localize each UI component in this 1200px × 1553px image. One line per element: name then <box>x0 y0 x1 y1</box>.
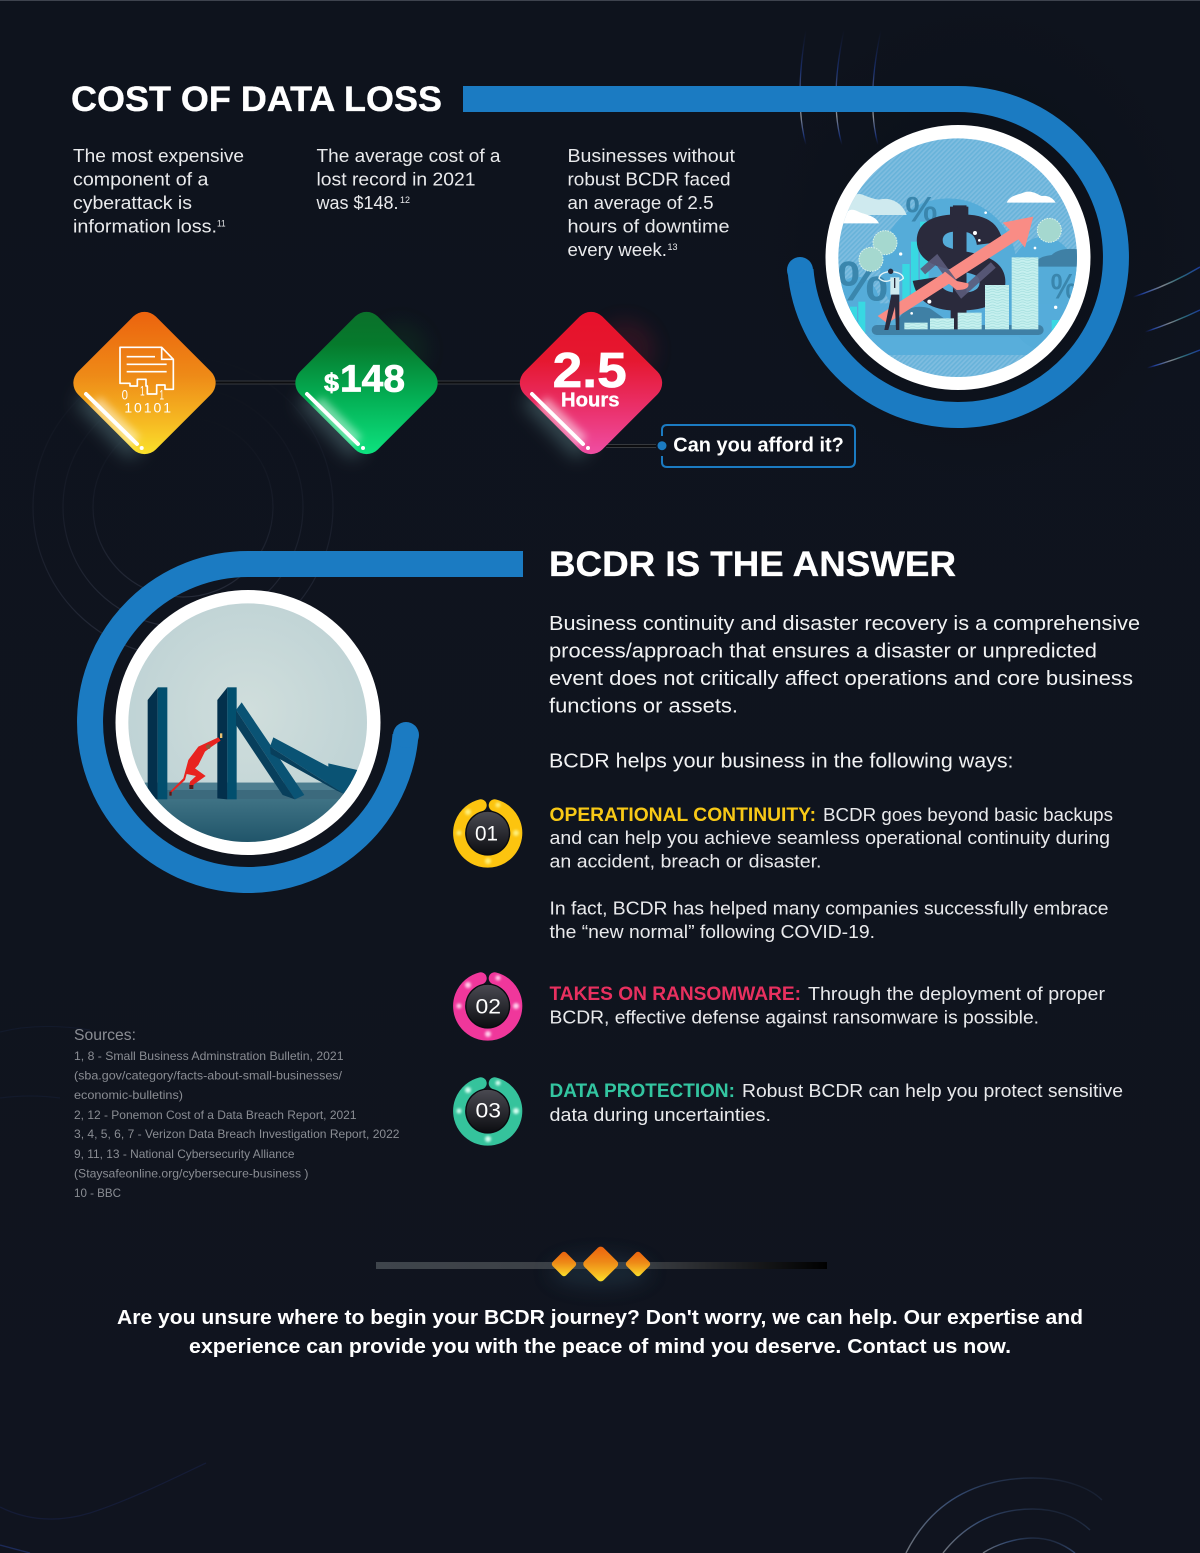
badge: 01 yellow ring <box>456 802 519 864</box>
item: takes on ransomware: TAKES ON RANSOMWARE: <box>550 983 801 1005</box>
sources list: (Staysafeonline.org/cybersecure-business ) <box>74 1167 308 1181</box>
ribbon end cap: BCDR section <box>393 722 419 748</box>
item: operational continuity <box>550 804 1113 942</box>
text block: information loss stat: information loss. <box>73 217 217 237</box>
item: operational continuity: In fact, BCDR has helped many companies successfully embrace <box>550 898 1108 918</box>
white circle frame <box>826 125 1090 390</box>
item: data protection <box>550 1080 1123 1125</box>
closing call to action: Are you unsure where to begin your BCDR journey? Don't worry, we can help. Our expertise and <box>117 1307 1083 1329</box>
sources list: Sources: <box>74 1027 136 1044</box>
text block: downtime stat: Businesses without <box>568 146 735 166</box>
badge: 03 green ring: 03 <box>476 1100 501 1122</box>
text block: downtime stat: an average of 2.5 <box>568 193 714 213</box>
title: cost of data loss: COST OF DATA LOSS <box>71 80 442 119</box>
ribbon end cap: cost section <box>787 257 813 283</box>
stat diamond: $148: 148 <box>340 359 405 401</box>
heading: BCDR is the answer: BCDR IS THE ANSWER <box>549 545 956 584</box>
badge: 02 pink ring: 02 <box>476 996 501 1018</box>
connector: stat 2 to stat 3 <box>436 380 521 384</box>
sources list: 2, 12 - Ponemon Cost of a Data Breach Report, 2021 <box>74 1108 357 1122</box>
illustration: man holding back falling dominoes <box>116 590 380 855</box>
stat diamond: information loss icon <box>72 312 216 462</box>
text block: BCDR definition: Business continuity and disaster recovery is a comprehensive <box>549 613 1140 635</box>
stat diamond: $148: $ <box>324 369 339 397</box>
text block: downtime stat: robust BCDR faced <box>568 170 730 190</box>
sources list: 10 - BBC <box>74 1186 121 1200</box>
text block: downtime stat: 13 <box>668 242 678 252</box>
item: takes on ransomware: BCDR, effective defense against ransomware is possible. <box>550 1006 1039 1028</box>
stat diamond: 2.5 hours: Hours <box>561 390 620 412</box>
stat diamond: 2.5 hours: 2.5 <box>553 344 627 398</box>
sources list: (sba.gov/category/facts-about-small-businesses/ <box>74 1068 343 1082</box>
text block: BCDR definition: functions or assets. <box>549 695 738 717</box>
text block: information loss stat: 11 <box>217 218 226 228</box>
closing call to action <box>117 1307 1083 1358</box>
text block: lost record stat: The average cost of a <box>316 146 502 166</box>
item: data protection: data during uncertainties. <box>550 1104 771 1125</box>
icon: corrupted document: 0 <box>122 386 128 402</box>
stat diamond: 2.5 hours <box>519 312 662 462</box>
item: operational continuity: an accident, breach or disaster. <box>550 851 822 872</box>
divider with orange diamonds <box>376 1245 827 1288</box>
illustration: dollar sign with rising arrow: % <box>905 191 937 230</box>
sources list: 1, 8 - Small Business Adminstration Bulletin, 2021 <box>74 1049 344 1063</box>
badge: 01 yellow ring: 01 <box>475 822 498 846</box>
icon: corrupted document: 1 <box>140 383 145 399</box>
item: takes on ransomware <box>550 983 1105 1028</box>
item: takes on ransomware: Through the deployment of proper <box>808 983 1105 1004</box>
figure: man in red pushing domino <box>169 733 222 796</box>
text block: BCDR definition <box>549 613 1140 717</box>
sources list <box>74 1027 400 1200</box>
text block: information loss stat: The most expensive <box>73 146 244 166</box>
text block: information loss stat: component of a <box>73 170 210 190</box>
connector: stat 1 to stat 2 <box>214 380 297 384</box>
illustration: dollar sign with rising arrow: % <box>837 251 888 314</box>
text block: lost record stat: lost record in 2021 <box>316 170 476 190</box>
text block: information loss stat: cyberattack is <box>73 193 192 213</box>
text block: BCDR definition: event does not critically affect operations and core business <box>549 668 1133 690</box>
icon: worried man <box>879 269 903 330</box>
item: data protection: Robust BCDR can help you protect sensitive <box>742 1080 1123 1101</box>
icon: corrupted document: 1 <box>159 386 164 402</box>
item: operational continuity: the “new normal” following COVID-19. <box>550 921 875 942</box>
ribbon: cost section spiral <box>463 99 1116 415</box>
closing call to action: experience can provide you with the peace of mind you deserve. Contact us now. <box>189 1336 1011 1358</box>
sources list: 3, 4, 5, 6, 7 - Verizon Data Breach Investigation Report, 2022 <box>74 1127 400 1141</box>
sources list: economic-bulletins) <box>74 1088 183 1102</box>
ribbon: BCDR section spiral <box>90 564 523 880</box>
white circle frame <box>116 590 380 855</box>
text block: information loss stat <box>73 146 244 237</box>
badge: 03 green ring <box>456 1080 519 1142</box>
item: operational continuity: and can help you achieve seamless operational continuity during <box>550 827 1110 848</box>
illustration: dollar sign with rising arrow: % <box>1051 267 1077 306</box>
text block: BCDR definition: process/approach that ensures a disaster or unpredicted <box>549 640 1097 662</box>
text block: lost record stat: 12 <box>400 195 410 205</box>
text block: downtime stat <box>568 146 735 260</box>
connector: stat 3 to callout <box>606 444 656 448</box>
item: operational continuity: BCDR goes beyond basic backups <box>823 804 1113 825</box>
text block: lost record stat <box>316 146 502 213</box>
illustration: dollar sign with rising arrow: $ <box>913 186 1005 340</box>
text block: downtime stat: hours of downtime <box>568 217 730 237</box>
callout: can you afford it: Can you afford it? <box>673 435 844 457</box>
stat diamond: $148 <box>294 312 438 462</box>
text block: lost record stat: was $148. <box>316 193 398 213</box>
item: operational continuity: OPERATIONAL CONTINUITY: <box>550 804 816 826</box>
badge: 02 pink ring <box>456 976 519 1037</box>
text block: BCDR helps intro: BCDR helps your business in the following ways: <box>549 750 1014 772</box>
icon: corrupted document <box>120 347 173 415</box>
sources list: 9, 11, 13 - National Cybersecurity Alliance <box>74 1147 295 1161</box>
icon: corrupted document: 10101 <box>124 399 171 415</box>
text block: downtime stat: every week. <box>568 240 667 260</box>
callout: can you afford it <box>658 425 855 467</box>
item: data protection: DATA PROTECTION: <box>550 1080 735 1102</box>
illustration: dollar sign with rising arrow <box>826 125 1090 390</box>
